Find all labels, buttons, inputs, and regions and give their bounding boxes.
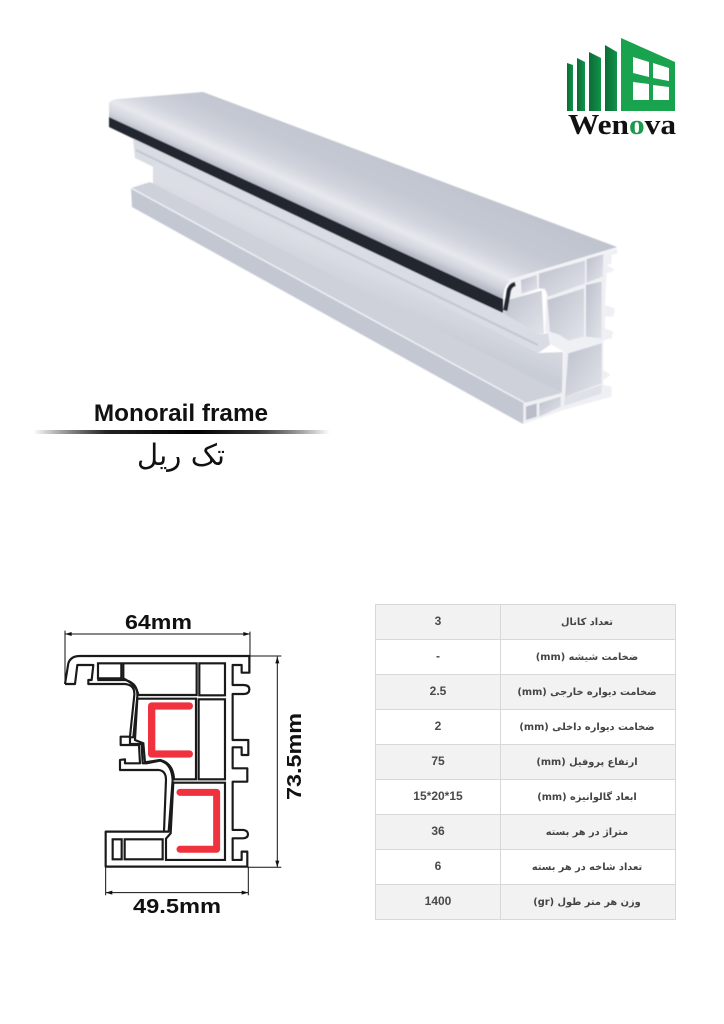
dimension lines	[65, 631, 281, 895]
logo: Wenova	[567, 38, 677, 141]
black gasket strip	[109, 117, 503, 313]
rail flange below the gasket	[133, 138, 550, 353]
profile outer contour	[65, 656, 249, 867]
galvanized steel insert: upper	[152, 706, 189, 754]
logo building	[621, 38, 675, 111]
cell: small top	[521, 275, 537, 293]
galvanized steel insert: lower	[180, 792, 217, 849]
logo windows	[633, 57, 669, 100]
table labels: تعداد کانال	[561, 617, 613, 628]
table labels: ضخامت دیواره خارجی (mm)	[517, 687, 657, 698]
table labels: وزن هر متر طول (gr)	[533, 897, 641, 908]
logo bars	[567, 45, 617, 111]
table values: 1400	[425, 894, 452, 908]
table values: 2.5	[430, 684, 447, 698]
table labels: متراژ در هر بسته	[546, 827, 628, 838]
front white edge	[509, 250, 612, 281]
table labels	[517, 617, 657, 908]
table values: 6	[435, 859, 442, 873]
cell: floor of large bottom	[564, 385, 602, 406]
heading: Persian title: تک ریل	[137, 438, 225, 472]
cell: rail channel	[503, 291, 544, 335]
rail highlight line	[136, 150, 538, 345]
table values: 3	[435, 614, 442, 628]
lower flange face	[131, 188, 525, 424]
logo wordmark: Wenova	[568, 109, 677, 141]
flange highlight line	[131, 188, 525, 403]
table labels: ضخامت شیشه (mm)	[536, 652, 638, 663]
table labels: ارتفاع پروفیل (mm)	[536, 757, 638, 768]
product photo: monorail frame profile	[109, 92, 618, 424]
profile inner chambers	[98, 663, 225, 860]
table values: 2	[435, 719, 442, 733]
table row backgrounds	[375, 604, 676, 919]
main body side face	[153, 160, 563, 393]
table grid	[375, 604, 676, 920]
cell: small bottom right	[539, 397, 561, 417]
dimension label: 64mm: 64mm	[125, 612, 192, 634]
dimension label: 73.5mm: 73.5mm	[284, 713, 306, 800]
heading: Monorail frame: Monorail frame	[94, 400, 268, 427]
table values	[413, 614, 463, 908]
technical cross-section diagram	[65, 631, 281, 895]
dimension arrowheads	[65, 632, 279, 895]
lower channel floor	[131, 182, 562, 403]
specification table	[375, 604, 676, 920]
dimension label: 49.5mm: 49.5mm	[133, 896, 221, 918]
top face and rounded nose	[109, 92, 617, 300]
table values: -	[436, 649, 440, 663]
table values: 75	[431, 754, 445, 768]
table labels: ابعاد گالوانیزه (mm)	[537, 791, 637, 803]
cell: large bottom	[565, 343, 602, 397]
profile cross-section end	[503, 248, 618, 424]
table labels: تعداد شاخه در هر بسته	[532, 862, 642, 873]
heading rule	[33, 430, 330, 434]
cell: right middle	[586, 282, 602, 338]
cell: large top	[539, 261, 585, 297]
table values: 15*20*15	[413, 789, 463, 803]
cell: top right	[587, 254, 603, 283]
cross-section face	[505, 248, 618, 424]
table labels: ضخامت دیواره داخلی (mm)	[519, 722, 655, 733]
table values: 36	[431, 824, 445, 838]
gasket end	[505, 284, 515, 311]
cell: large middle	[547, 288, 584, 341]
cell: small bottom left	[526, 403, 537, 420]
